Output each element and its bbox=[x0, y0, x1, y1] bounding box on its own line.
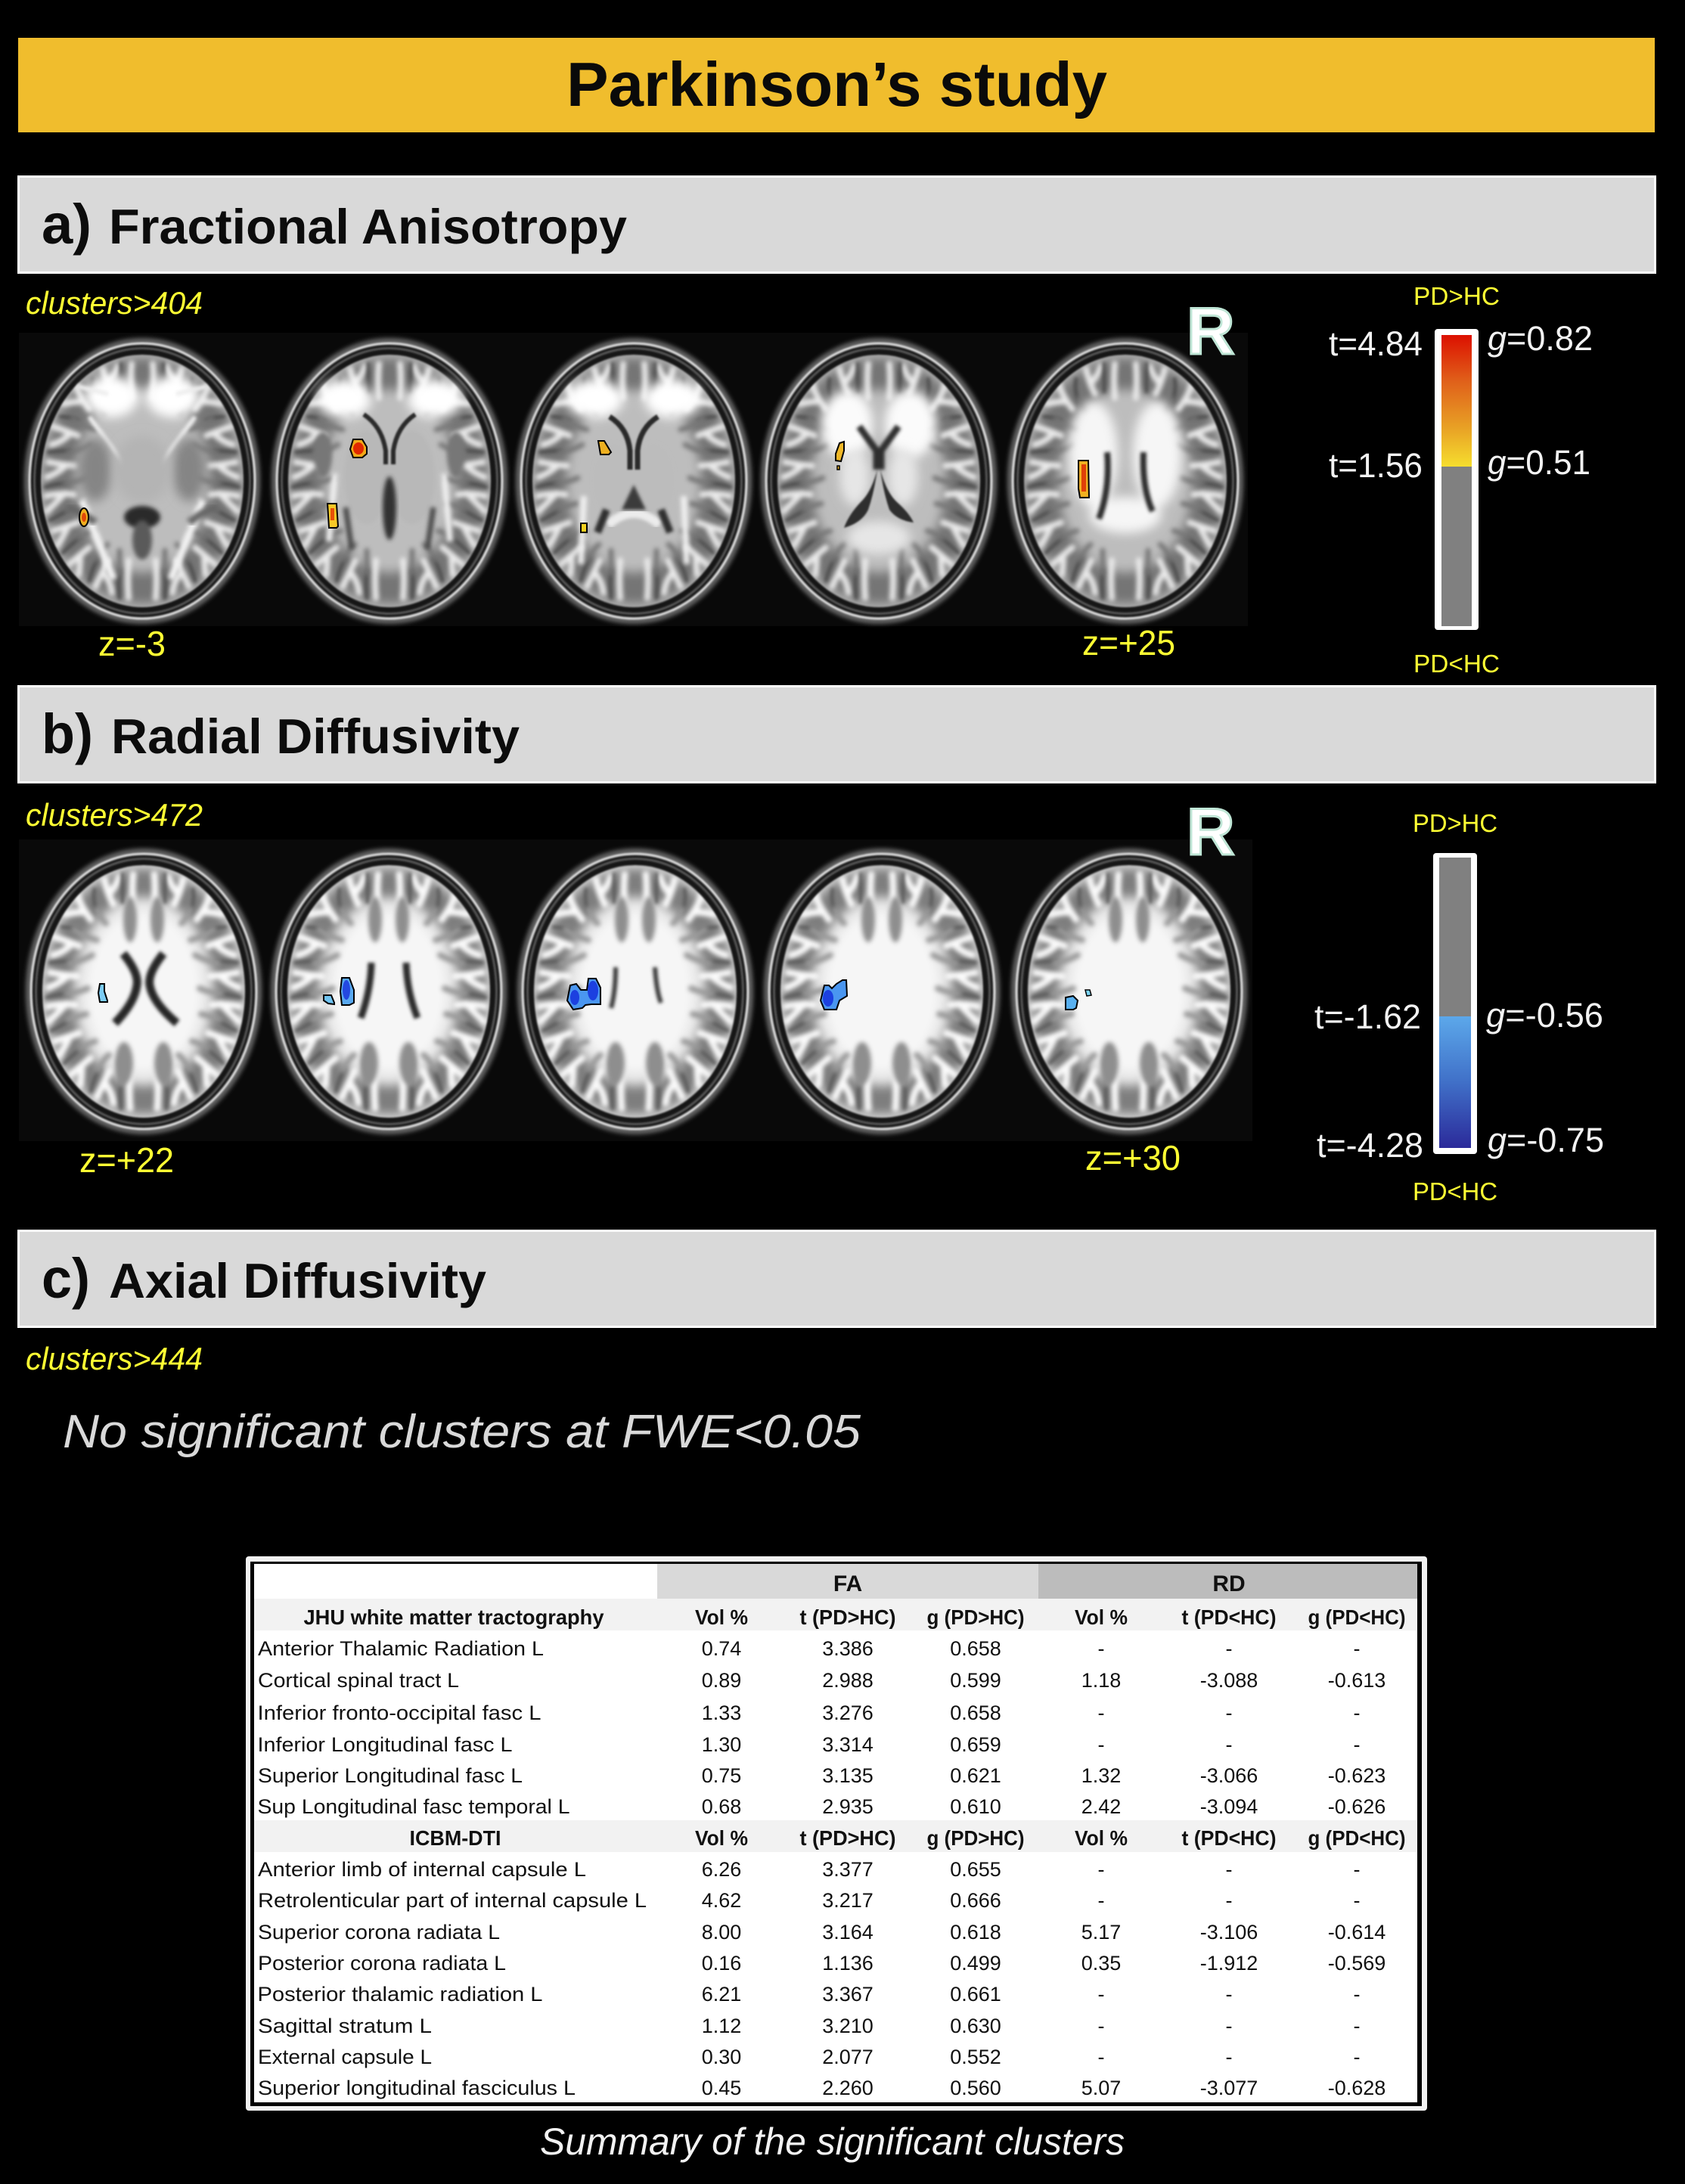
row bbox=[258, 2046, 1360, 2068]
row: 0.30 bbox=[702, 2046, 741, 2068]
activation clusters bbox=[1066, 990, 1091, 1010]
row: 3.276 bbox=[822, 1702, 874, 1724]
brain slice 3 bbox=[519, 341, 749, 621]
row: - bbox=[1098, 2015, 1104, 2037]
brain slice 2 bbox=[275, 341, 504, 621]
row: Posterior corona radiata L bbox=[258, 1952, 506, 1975]
row: - bbox=[1354, 1702, 1360, 1724]
cluster threshold b: clusters>472 bbox=[26, 797, 203, 833]
activation cluster bbox=[1078, 461, 1089, 498]
row bbox=[258, 1858, 1360, 1881]
table header: ICBM bbox=[254, 1820, 1417, 1852]
row: Anterior limb of internal capsule L bbox=[258, 1858, 586, 1881]
colorbar b: g=-0.56 bbox=[1486, 996, 1603, 1035]
cluster threshold a: clusters>404 bbox=[26, 285, 203, 321]
row: - bbox=[1098, 1733, 1104, 1756]
row: - bbox=[1225, 1733, 1233, 1756]
heading: c) Axial Diffusivity: Axial Diffusivity bbox=[109, 1253, 486, 1308]
row: 2.988 bbox=[822, 1669, 874, 1692]
activation clusters bbox=[324, 978, 354, 1005]
row: Superior corona radiata L bbox=[258, 1921, 500, 1944]
colorbar a: PD>HC bbox=[1413, 282, 1500, 310]
row bbox=[257, 1983, 1360, 2006]
table header: ICBM: g (PD>HC) bbox=[927, 1826, 1024, 1850]
table header: ICBM: t (PD>HC) bbox=[800, 1826, 895, 1850]
row: 2.42 bbox=[1081, 1795, 1121, 1818]
table header: ICBM: Vol % bbox=[695, 1826, 748, 1850]
row: -0.628 bbox=[1328, 2077, 1386, 2099]
row: - bbox=[1225, 1858, 1233, 1881]
row: 1.18 bbox=[1081, 1669, 1121, 1692]
row: 3.367 bbox=[822, 1983, 874, 2006]
row: 3.164 bbox=[822, 1921, 874, 1944]
panel: FA brain slices bbox=[19, 333, 1248, 626]
row: 5.07 bbox=[1081, 2077, 1121, 2099]
colorbar b: t=-1.62 bbox=[1314, 997, 1421, 1036]
row: 0.599 bbox=[950, 1669, 1001, 1692]
row: - bbox=[1354, 1858, 1360, 1881]
row: -3.066 bbox=[1200, 1764, 1258, 1787]
row: Superior longitudinal fasciculus L bbox=[258, 2077, 576, 2099]
row: Sup Longitudinal fasc temporal L bbox=[257, 1795, 570, 1818]
activation clusters bbox=[836, 442, 844, 470]
row: - bbox=[1098, 1889, 1104, 1912]
row: 3.386 bbox=[822, 1637, 874, 1660]
row: 0.658 bbox=[950, 1637, 1001, 1660]
brain slice 2 bbox=[274, 852, 504, 1131]
row: 3.314 bbox=[822, 1733, 874, 1756]
row: -3.077 bbox=[1200, 2077, 1258, 2099]
row: 0.618 bbox=[950, 1921, 1001, 1944]
brain slice 3 bbox=[520, 852, 750, 1131]
table group header FA: FA bbox=[833, 1571, 862, 1596]
z label +25: z=+25 bbox=[1082, 623, 1175, 662]
activation cluster bbox=[98, 984, 107, 1002]
row bbox=[258, 1637, 1360, 1660]
row: - bbox=[1354, 1637, 1360, 1660]
brain slice z=+30 bbox=[1014, 852, 1244, 1131]
row: Inferior fronto-occipital fasc L bbox=[257, 1702, 541, 1724]
row: - bbox=[1098, 1983, 1104, 2006]
heading: a) Fractional Anisotropy: a) bbox=[42, 193, 92, 256]
heading: b) Radial Diffusivity: Radial Diffusivity bbox=[111, 709, 520, 764]
brain slice z=+25 bbox=[1010, 341, 1240, 621]
heading: b) Radial Diffusivity: b) bbox=[42, 703, 93, 765]
row: - bbox=[1225, 1889, 1233, 1912]
heading: a) Fractional Anisotropy bbox=[18, 177, 1655, 272]
row: - bbox=[1225, 2015, 1233, 2037]
row: - bbox=[1354, 2015, 1360, 2037]
heading: c) Axial Diffusivity bbox=[18, 1231, 1655, 1326]
row: 0.75 bbox=[702, 1764, 741, 1787]
row: 0.560 bbox=[950, 2077, 1001, 2099]
row: -3.088 bbox=[1200, 1669, 1258, 1692]
heading: b) Radial Diffusivity bbox=[18, 687, 1655, 782]
row: 6.26 bbox=[702, 1858, 741, 1881]
row: - bbox=[1225, 1983, 1233, 2006]
row: 0.630 bbox=[950, 2015, 1001, 2037]
row: - bbox=[1098, 1858, 1104, 1881]
table header: JHU bbox=[254, 1599, 1417, 1630]
no result note: No significant clusters at FWE<0.05 bbox=[63, 1406, 861, 1458]
row: 6.21 bbox=[702, 1983, 741, 2006]
row: 4.62 bbox=[702, 1889, 741, 1912]
brain slice z=-3 bbox=[27, 341, 257, 621]
row: -3.094 bbox=[1200, 1795, 1258, 1818]
row: - bbox=[1098, 2046, 1104, 2068]
brain slice z=+22 bbox=[29, 852, 259, 1131]
row: 2.077 bbox=[822, 2046, 874, 2068]
table group header FA bbox=[657, 1564, 1038, 1599]
cluster threshold c: clusters>444 bbox=[26, 1341, 203, 1376]
table header: ICBM: Vol % bbox=[1075, 1826, 1128, 1850]
row: 0.655 bbox=[950, 1858, 1001, 1881]
row: 0.659 bbox=[950, 1733, 1001, 1756]
row: -0.623 bbox=[1328, 1764, 1386, 1787]
colorbar b: t=-4.28 bbox=[1317, 1126, 1423, 1165]
row bbox=[258, 1764, 1386, 1787]
colorbar a bbox=[1329, 282, 1593, 678]
row: 8.00 bbox=[702, 1921, 741, 1944]
caption: Summary of the significant clusters bbox=[540, 2120, 1125, 2163]
activation clusters bbox=[821, 980, 847, 1010]
row: 3.377 bbox=[822, 1858, 874, 1881]
table: summary of clusters bbox=[246, 1556, 1427, 2111]
table header: ICBM: t (PD<HC) bbox=[1181, 1826, 1277, 1850]
row: - bbox=[1354, 1983, 1360, 2006]
table header: ICBM: g (PD<HC) bbox=[1308, 1826, 1405, 1850]
table group header RD bbox=[1038, 1564, 1417, 1599]
row: 0.552 bbox=[950, 2046, 1001, 2068]
activation clusters bbox=[327, 439, 367, 528]
row: -1.912 bbox=[1200, 1952, 1258, 1975]
panel: RD brain slices bbox=[19, 839, 1252, 1141]
row: 0.16 bbox=[702, 1952, 741, 1975]
row: 1.136 bbox=[822, 1952, 874, 1975]
colorbar b bbox=[1314, 809, 1604, 1205]
row: External capsule L bbox=[258, 2046, 432, 2068]
activation clusters bbox=[581, 441, 611, 532]
orientation marker R (row b): R bbox=[1187, 794, 1235, 869]
row: 0.45 bbox=[702, 2077, 741, 2099]
table header: JHU: t (PD<HC) bbox=[1181, 1605, 1277, 1629]
row bbox=[258, 1669, 1386, 1692]
colorbar a: g=0.51 bbox=[1488, 443, 1590, 482]
z label +22: z=+22 bbox=[79, 1140, 174, 1180]
row: 0.661 bbox=[950, 1983, 1001, 2006]
row: 1.30 bbox=[702, 1733, 741, 1756]
row: 5.17 bbox=[1081, 1921, 1121, 1944]
row: Sagittal stratum L bbox=[258, 2015, 432, 2037]
colorbar a: t=4.84 bbox=[1329, 324, 1423, 363]
row: - bbox=[1098, 1702, 1104, 1724]
row bbox=[257, 1733, 1360, 1756]
row: 0.658 bbox=[950, 1702, 1001, 1724]
row: 0.89 bbox=[702, 1669, 741, 1692]
row: Superior Longitudinal fasc L bbox=[258, 1764, 523, 1787]
row: - bbox=[1225, 1702, 1233, 1724]
row: - bbox=[1354, 1889, 1360, 1912]
row: - bbox=[1225, 2046, 1233, 2068]
colorbar a: g=0.82 bbox=[1488, 319, 1593, 358]
title: Parkinson’s study bbox=[566, 49, 1107, 119]
colorbar b: PD<HC bbox=[1413, 1177, 1497, 1205]
row: Anterior Thalamic Radiation L bbox=[258, 1637, 544, 1660]
row: 3.210 bbox=[822, 2015, 874, 2037]
row: 0.68 bbox=[702, 1795, 741, 1818]
z label +30: z=+30 bbox=[1085, 1138, 1181, 1177]
brain slice 4 bbox=[767, 852, 997, 1131]
row: 3.135 bbox=[822, 1764, 874, 1787]
row bbox=[258, 1921, 1386, 1944]
row: 0.74 bbox=[702, 1637, 741, 1660]
row: Cortical spinal tract L bbox=[258, 1669, 459, 1692]
table header: JHU: t (PD>HC) bbox=[800, 1605, 895, 1629]
title bbox=[18, 38, 1655, 132]
table header: JHU: g (PD>HC) bbox=[927, 1605, 1024, 1629]
row bbox=[258, 1889, 1360, 1912]
brain slice 4 bbox=[764, 341, 994, 621]
table header: JHU: Vol % bbox=[695, 1605, 748, 1629]
row: - bbox=[1354, 1733, 1360, 1756]
table header: JHU: g (PD<HC) bbox=[1308, 1605, 1405, 1629]
table group header RD: RD bbox=[1212, 1571, 1246, 1596]
row: - bbox=[1098, 1637, 1104, 1660]
row: 2.260 bbox=[822, 2077, 874, 2099]
colorbar a: t=1.56 bbox=[1329, 446, 1423, 485]
row: Inferior Longitudinal fasc L bbox=[257, 1733, 513, 1756]
row: -0.626 bbox=[1328, 1795, 1386, 1818]
row: 0.666 bbox=[950, 1889, 1001, 1912]
table header: JHU: JHU white matter tractography bbox=[304, 1605, 604, 1629]
row: -0.569 bbox=[1328, 1952, 1386, 1975]
row: - bbox=[1225, 1637, 1233, 1660]
heading: c) Axial Diffusivity: c) bbox=[42, 1247, 90, 1310]
orientation marker R (row a): R bbox=[1187, 293, 1235, 368]
row: 1.33 bbox=[702, 1702, 741, 1724]
row bbox=[258, 2077, 1386, 2099]
activation cluster bbox=[79, 508, 88, 526]
heading: a) Fractional Anisotropy: Fractional Anisotropy bbox=[109, 199, 627, 254]
row: - bbox=[1354, 2046, 1360, 2068]
table header: JHU: Vol % bbox=[1075, 1605, 1128, 1629]
colorbar b: g=-0.75 bbox=[1488, 1121, 1604, 1159]
row bbox=[257, 1702, 1360, 1724]
row bbox=[258, 2015, 1360, 2037]
table header: ICBM: ICBM-DTI bbox=[410, 1826, 501, 1850]
row: 2.935 bbox=[822, 1795, 874, 1818]
row: Posterior thalamic radiation L bbox=[257, 1983, 543, 2006]
colorbar b: PD>HC bbox=[1413, 809, 1497, 837]
row: -3.106 bbox=[1200, 1921, 1258, 1944]
row: 0.35 bbox=[1081, 1952, 1121, 1975]
row: 1.32 bbox=[1081, 1764, 1121, 1787]
colorbar a: PD<HC bbox=[1413, 650, 1500, 678]
z label -3: z=-3 bbox=[98, 624, 166, 663]
activation clusters bbox=[567, 979, 600, 1010]
row: 0.621 bbox=[950, 1764, 1001, 1787]
row bbox=[257, 1795, 1386, 1818]
row: 0.610 bbox=[950, 1795, 1001, 1818]
row: Retrolenticular part of internal capsule L bbox=[258, 1889, 647, 1912]
row: -0.613 bbox=[1328, 1669, 1386, 1692]
row: 0.499 bbox=[950, 1952, 1001, 1975]
row: -0.614 bbox=[1328, 1921, 1386, 1944]
row bbox=[258, 1952, 1386, 1975]
row: 1.12 bbox=[702, 2015, 741, 2037]
row: 3.217 bbox=[822, 1889, 874, 1912]
